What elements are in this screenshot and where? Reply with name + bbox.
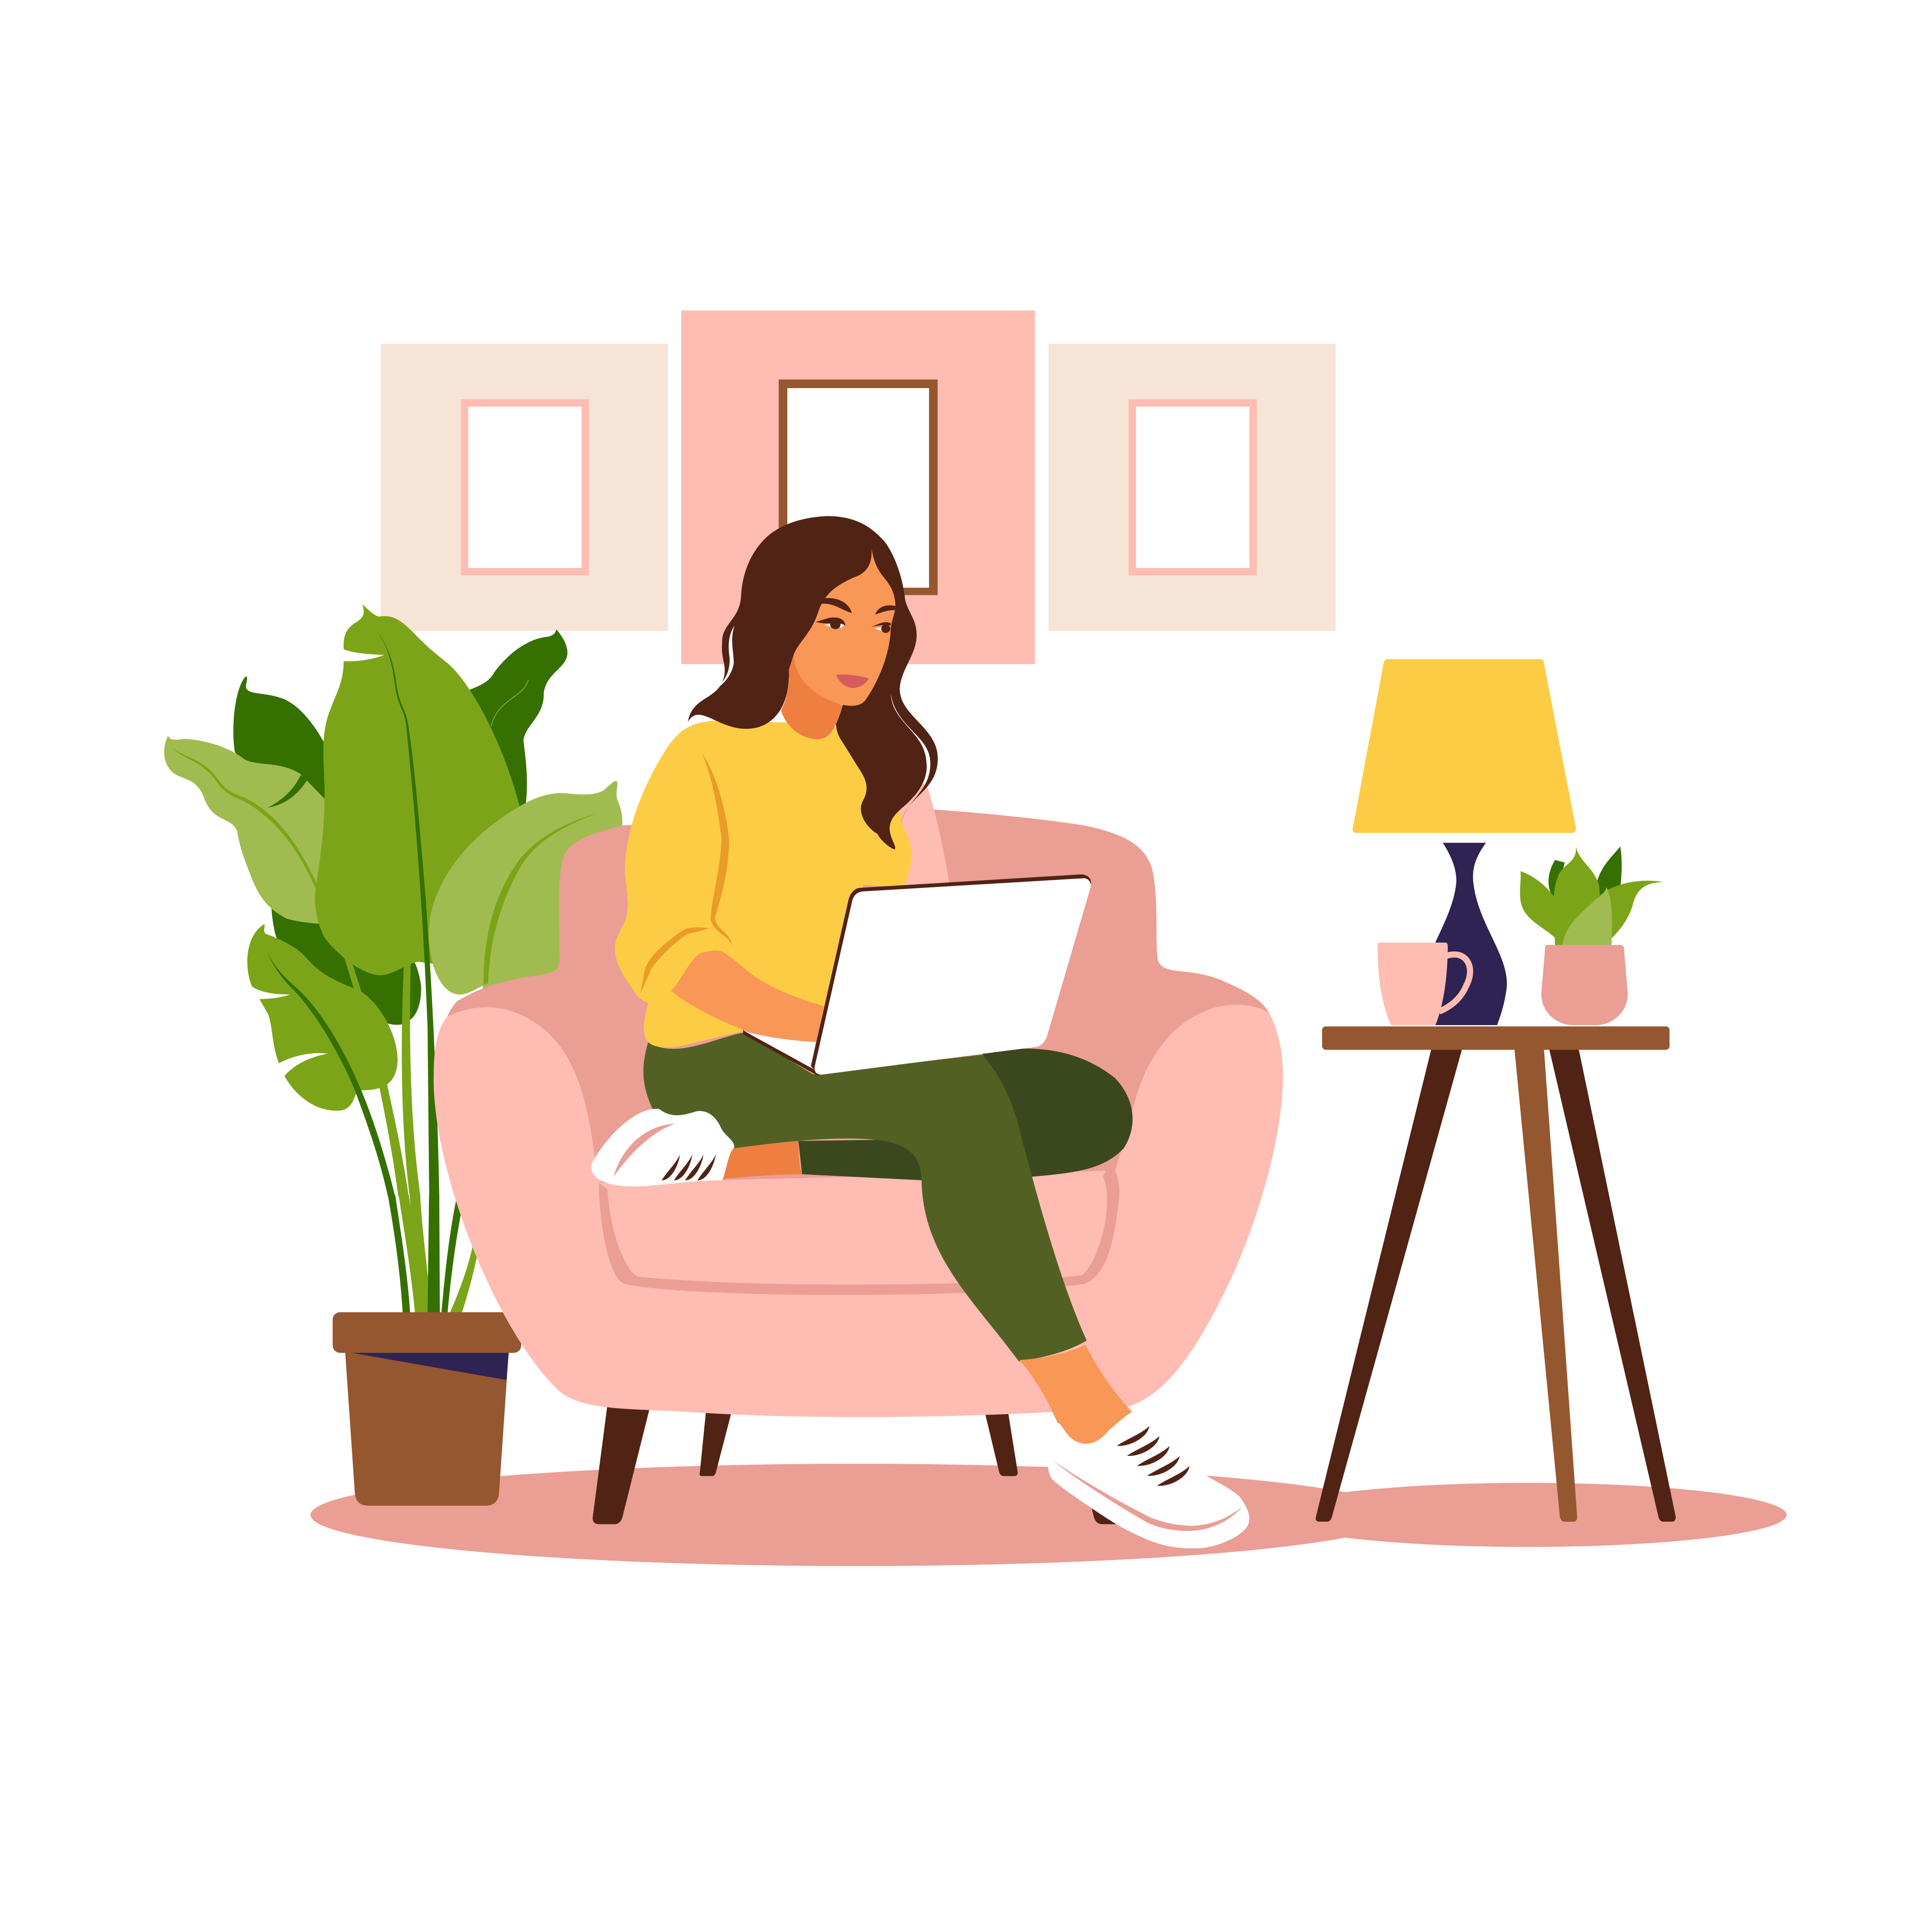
plant: stems to pot <box>388 1195 440 1316</box>
vein: dark right leaf <box>491 680 529 726</box>
vein: light right leaf <box>484 813 597 985</box>
ankle <box>1020 1345 1132 1444</box>
plant: back stems <box>441 1201 480 1316</box>
sneaker <box>1048 1412 1250 1548</box>
chair highlight behind torso <box>895 783 949 889</box>
near leg <box>644 1033 1087 1362</box>
potted plant <box>164 604 622 1505</box>
plant pot <box>333 1312 521 1505</box>
near foot in detail space <box>1020 1345 1250 1548</box>
side table <box>1316 1027 1676 1522</box>
hair <box>688 516 938 849</box>
armchair <box>434 810 1283 1417</box>
small potted plant <box>1520 847 1664 1025</box>
eye: right <box>872 622 891 633</box>
table: dark legs <box>1316 1047 1676 1522</box>
sweater fold: upper arm <box>702 754 733 949</box>
leaf: light left <box>164 736 327 924</box>
face <box>794 549 895 706</box>
lamp <box>1352 659 1576 1025</box>
laptop: keyboard deck <box>743 1031 816 1069</box>
wall pictures <box>381 311 1336 664</box>
chair legs <box>593 1405 1121 1524</box>
floor rugs <box>311 1464 1786 1566</box>
leaf: main centre <box>315 604 520 976</box>
laptop: back of lid <box>811 874 1091 1073</box>
eye: left <box>816 618 845 629</box>
chair: back and body <box>434 810 1275 1232</box>
sneaker laces <box>1117 1426 1189 1486</box>
vein: light left leaf <box>171 746 318 889</box>
small plant: pot <box>1541 945 1628 1025</box>
upper body in detail space <box>615 516 1091 1076</box>
laptop <box>743 874 1091 1076</box>
vein and stem: main leaf <box>372 624 439 1196</box>
sneaker sole stripe <box>1052 1460 1243 1531</box>
laptop: lid <box>815 878 1091 1075</box>
vein and stem: lower leaf <box>267 947 395 1196</box>
table: brown leg <box>1514 1047 1577 1522</box>
left shoe <box>591 1109 734 1186</box>
woman <box>591 516 1250 1548</box>
lips <box>836 675 869 688</box>
plant: leaves and stems in detail space <box>164 604 622 1196</box>
far leg <box>721 1049 1133 1180</box>
leaf: dark left <box>233 676 327 801</box>
leaf: dark lower centre <box>271 909 421 1025</box>
picture: centre frame <box>682 311 1035 664</box>
mug <box>1377 943 1470 1025</box>
leaf inlay <box>268 775 307 808</box>
stem: lower leaf upper part <box>344 959 362 993</box>
picture: left frame <box>381 344 668 631</box>
leaf: lower <box>247 924 398 1111</box>
small plant: leaves <box>1520 847 1664 946</box>
eyebrows <box>822 598 896 614</box>
laptop: deck edge <box>743 1029 822 1076</box>
table: top <box>1322 1027 1670 1050</box>
lamp: shade <box>1352 659 1576 833</box>
stem: lower leaf lower part <box>379 1084 409 1196</box>
forearm <box>671 950 824 1042</box>
neck <box>781 655 843 739</box>
leaf: light right <box>429 781 622 1001</box>
lamp: base <box>1421 843 1507 1025</box>
sweater fold: cuff <box>640 927 709 994</box>
hair highlight gap <box>708 625 734 693</box>
stem: centre light <box>402 963 421 1196</box>
chair: seat cushion shadow <box>599 1164 1119 1295</box>
sweater <box>615 721 912 1047</box>
picture: right frame <box>1049 344 1336 631</box>
leaf: dark right <box>470 629 567 809</box>
chair: arms and seat <box>434 1005 1283 1417</box>
